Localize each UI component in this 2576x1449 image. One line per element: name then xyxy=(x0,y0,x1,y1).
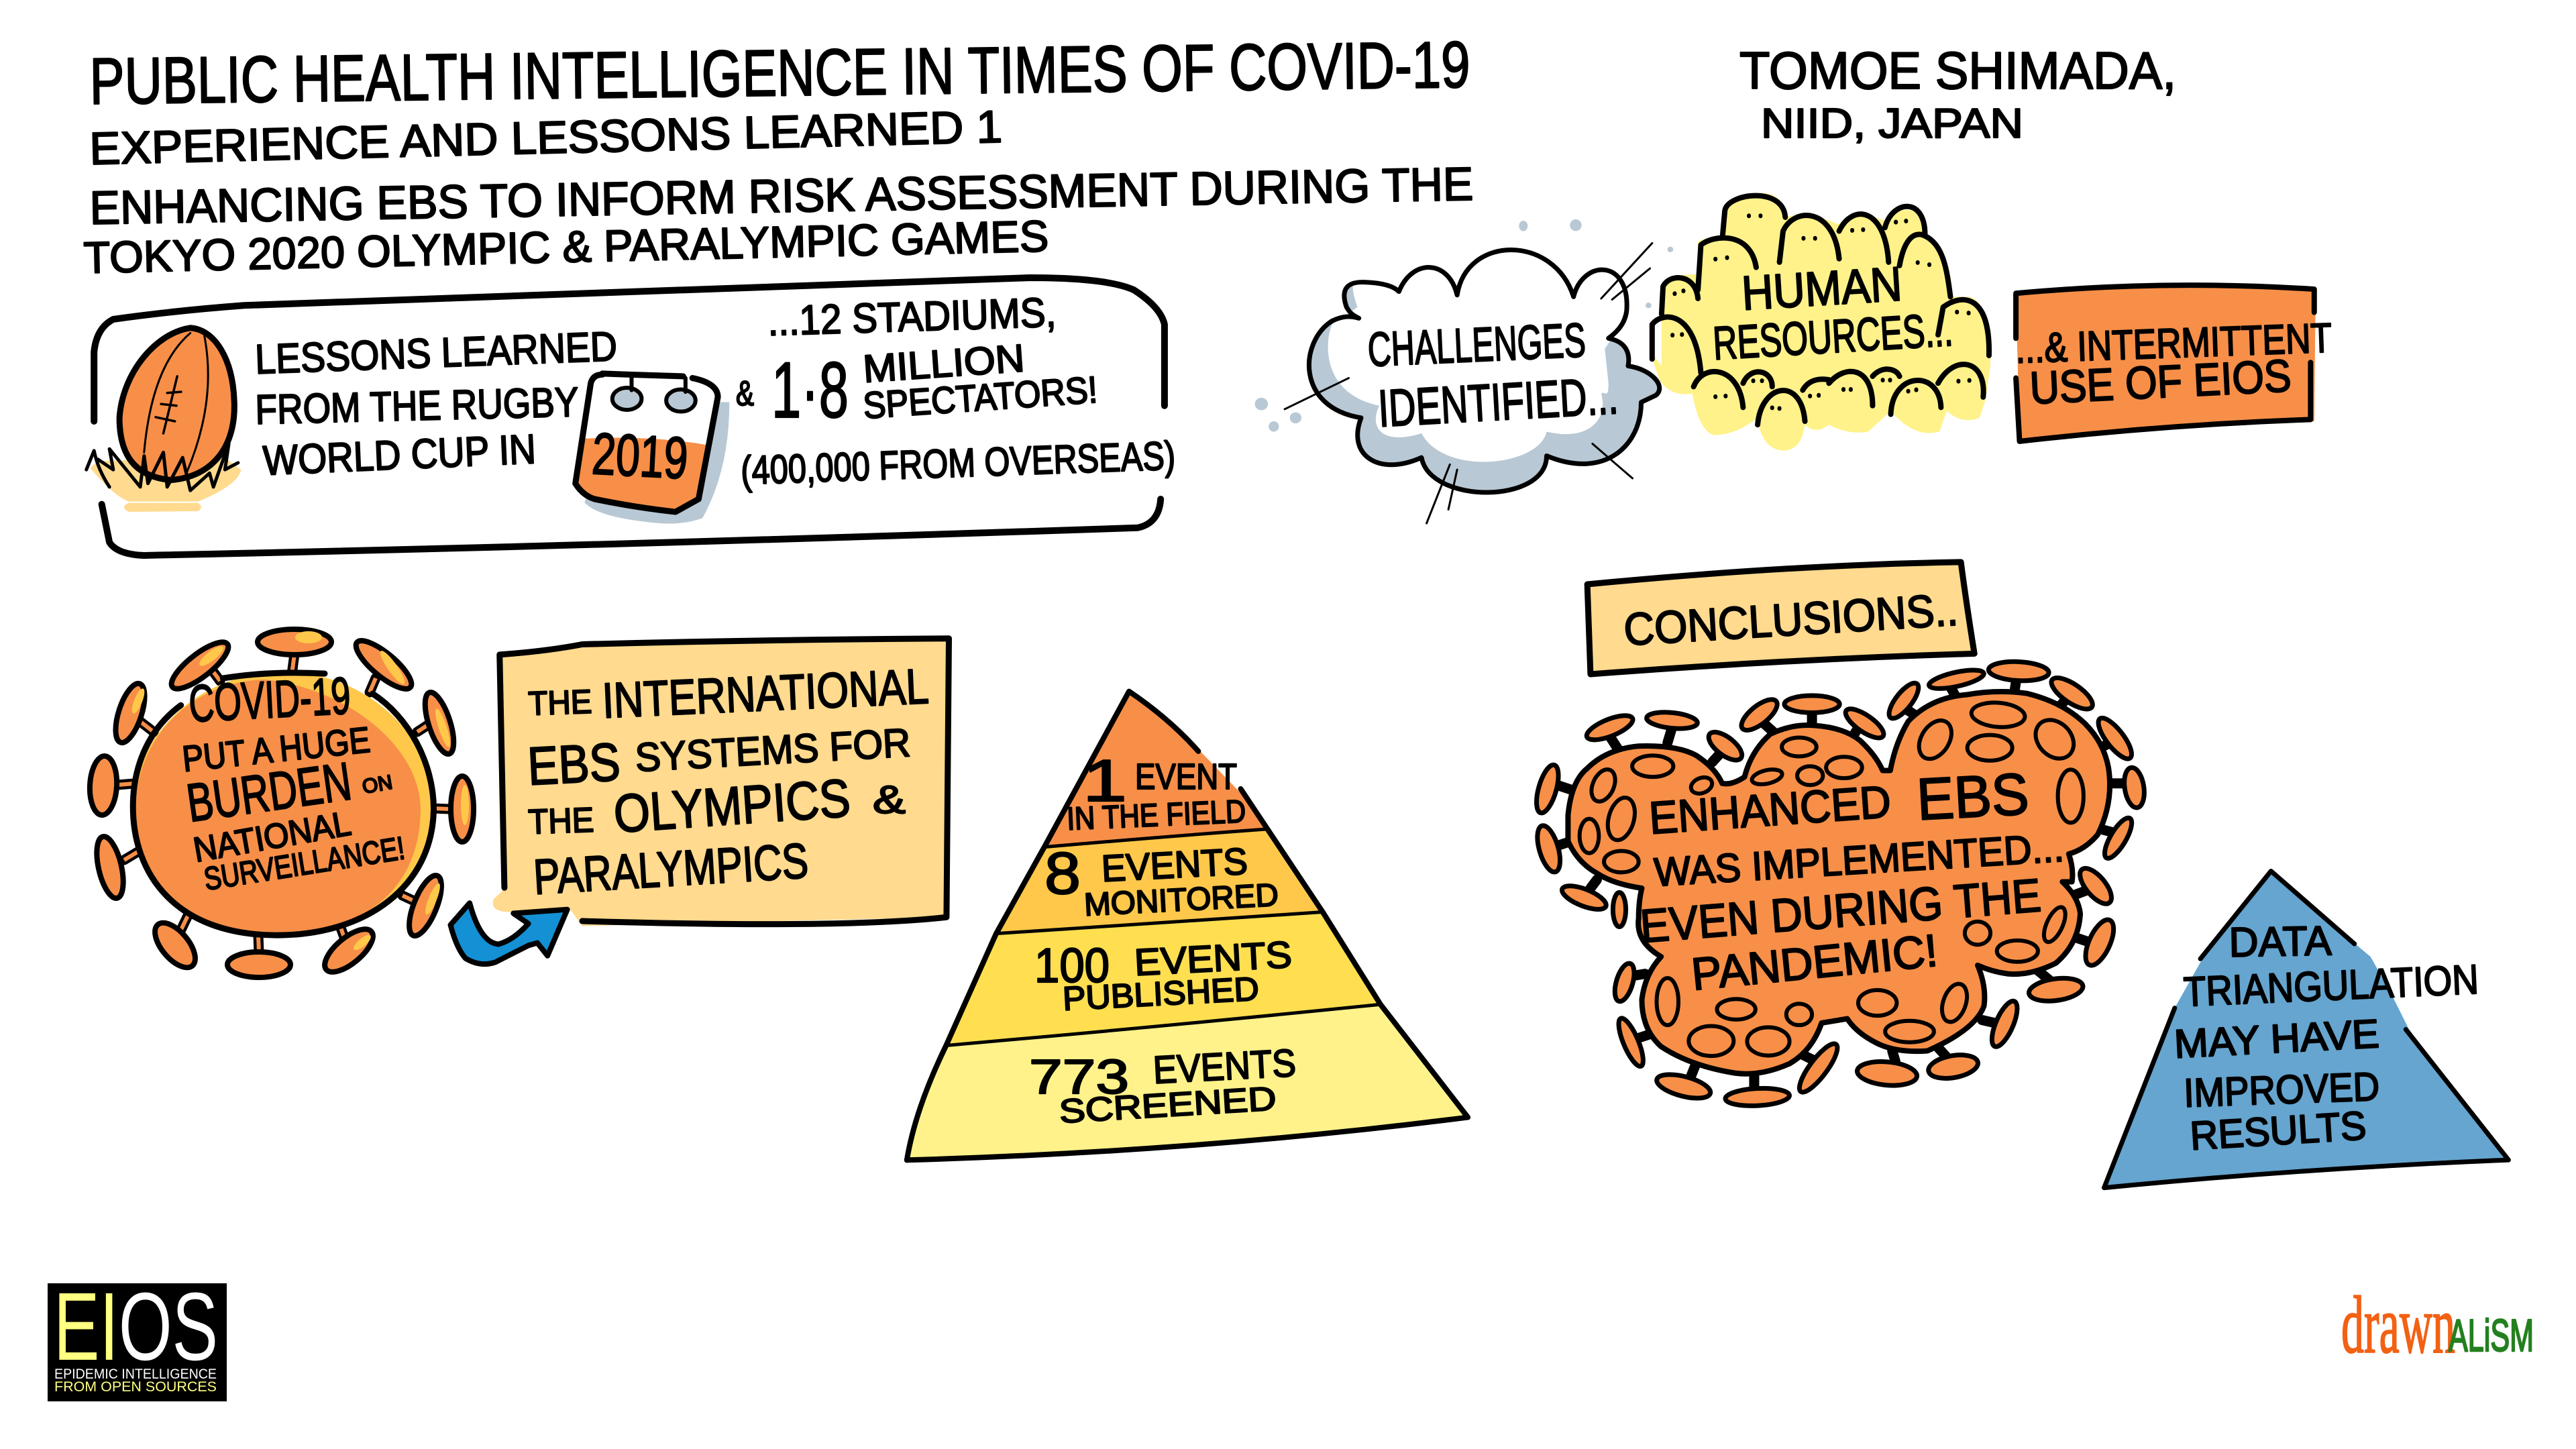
text: international EBS systems: & xyxy=(873,778,906,822)
text: enhanced EBS: ENHANCED xyxy=(1648,776,1892,844)
text: enhanced EBS: PANDEMIC! xyxy=(1689,925,1940,1000)
cluster spots xyxy=(1580,700,2084,1056)
virus body xyxy=(133,672,434,935)
logo: drawnalism: drawn xyxy=(2341,1280,2455,1371)
text: data triangulation: TRIANGULATION xyxy=(2183,957,2479,1016)
text: international EBS systems xyxy=(526,658,930,905)
text: international EBS systems: THE xyxy=(527,683,592,722)
text: stadiums and spectators: MILLION xyxy=(861,336,1026,391)
panel: rugby world cup lessons xyxy=(87,278,1176,555)
text: international EBS systems: OLYMPICS xyxy=(612,768,852,844)
title block xyxy=(83,28,1474,282)
text: challenges identified: IDENTIFIED... xyxy=(1377,366,1619,438)
pyramid labels: SCREENED xyxy=(1058,1079,1277,1130)
text: enhanced EBS: WAS IMPLEMENTED... xyxy=(1653,825,2065,895)
text: enhanced EBS: EVEN DURING THE xyxy=(1638,869,2043,953)
panel: intermittent use of EIOS xyxy=(2015,285,2332,441)
pyramid labels: 8 xyxy=(1044,840,1081,906)
text: international EBS systems: PARALYMPICS xyxy=(532,833,810,905)
crowd of figures xyxy=(1648,193,1990,451)
logo: EIOS: EPIDEMIC INTELLIGENCE xyxy=(54,1366,217,1382)
panel: challenges cloud xyxy=(1255,219,1673,523)
text: covid-19 put a huge burden: SURVEILLANCE! xyxy=(201,830,407,898)
icon: rugby ball in grass xyxy=(87,328,241,512)
panel: covid-19 virus burden xyxy=(89,629,474,979)
text: covid-19 put a huge burden xyxy=(180,665,407,898)
pyramid bands xyxy=(907,692,1468,1160)
spike highlights xyxy=(129,631,469,953)
text: human resources xyxy=(1711,258,1954,370)
pyramid labels xyxy=(1029,747,1297,1130)
text: stadiums and spectators xyxy=(736,290,1176,493)
text: enhanced EBS xyxy=(1638,760,2065,1000)
speech cloud shape xyxy=(1255,219,1673,523)
pyramid labels: 1 xyxy=(1083,747,1127,814)
text: data triangulation: IMPROVED xyxy=(2183,1064,2380,1116)
text: data triangulation xyxy=(2173,918,2479,1159)
panel: enhanced EBS virus cluster xyxy=(1532,660,2147,1108)
pyramid labels: EVENTS xyxy=(1100,840,1248,890)
text: lessons learned xyxy=(254,323,618,484)
text: challenges identified: CHALLENGES xyxy=(1366,313,1587,377)
text: data triangulation: DATA xyxy=(2229,918,2332,966)
orange box xyxy=(2016,285,2316,441)
panel: international EBS callout xyxy=(451,637,951,964)
text: stadiums and spectators: 1·8 xyxy=(771,346,849,435)
cluster body xyxy=(1568,692,2110,1074)
text: covid-19 put a huge burden: BURDEN xyxy=(183,751,355,833)
panel: conclusions heading: CONCLUSIONS.. xyxy=(1622,584,1960,655)
text: stadiums and spectators: (400,000 FROM OVERSEAS) xyxy=(740,433,1176,493)
icon: calendar 2019: 2019 xyxy=(590,420,690,491)
text: international EBS systems: INTERNATIONAL xyxy=(601,658,930,729)
pyramid labels: EVENTS xyxy=(1152,1041,1297,1092)
virus cluster illustration xyxy=(1532,660,2147,1108)
text: covid-19 put a huge burden: PUT A HUGE xyxy=(180,720,372,780)
panel: data triangulation triangle xyxy=(2104,871,2508,1188)
text: intermittent use xyxy=(2015,315,2332,414)
text: stadiums and spectators: ...12 STADIUMS, xyxy=(767,290,1057,345)
text: international EBS systems: SYSTEMS FOR xyxy=(634,720,912,780)
text: stadiums and spectators: SPECTATORS! xyxy=(861,368,1099,427)
text: data triangulation: MAY HAVE xyxy=(2173,1011,2380,1067)
text: intermittent use: USE OF EIOS xyxy=(2029,350,2292,414)
pyramid labels: PUBLISHED xyxy=(1062,970,1260,1018)
pyramid labels: EVENTS xyxy=(1133,933,1293,983)
pyramid labels: 100 xyxy=(1034,939,1110,993)
text: human resources: HUMAN xyxy=(1740,258,1904,321)
conclusions box xyxy=(1587,562,1974,674)
blue triangle xyxy=(2104,871,2508,1188)
text: intermittent use: ...& INTERMITTENT xyxy=(2015,315,2332,372)
author credit xyxy=(1739,41,2176,147)
text: lessons learned: LESSONS LEARNED xyxy=(254,323,618,383)
panel: human resources crowd xyxy=(1648,193,1990,451)
pyramid labels: EVENT xyxy=(1135,757,1237,797)
author credit: TOMOE SHIMADA, xyxy=(1739,41,2176,100)
pyramid labels: IN THE FIELD xyxy=(1066,794,1246,837)
text: lessons learned: FROM THE RUGBY xyxy=(255,379,579,433)
subtitle line 3: TOKYO 2020 OLYMPIC & PARALYMPIC GAMES xyxy=(83,211,1049,282)
logo: EIOS: FROM OPEN SOURCES xyxy=(54,1379,217,1395)
main title: PUBLIC HEALTH INTELLIGENCE IN TIMES OF COVID-19 xyxy=(89,28,1470,118)
text: covid-19 put a huge burden: COVID-19 xyxy=(187,665,352,733)
cluster stems xyxy=(1558,681,2127,1087)
text: enhanced EBS: EBS xyxy=(1915,760,2031,833)
panel: conclusions heading xyxy=(1587,562,1974,674)
text: human resources: RESOURCES... xyxy=(1711,303,1954,370)
cluster spikes xyxy=(1532,660,2147,1108)
text: international EBS systems: THE xyxy=(527,801,594,842)
author credit: NIID, JAPAN xyxy=(1761,101,2023,147)
subtitle line 1: EXPERIENCE AND LESSONS LEARNED 1 xyxy=(89,101,1003,174)
text: data triangulation: RESULTS xyxy=(2189,1103,2367,1159)
text: international EBS systems: EBS xyxy=(526,732,622,796)
pyramid labels: 773 xyxy=(1029,1051,1129,1104)
text: challenges identified xyxy=(1366,313,1619,438)
icon: calendar 2019 xyxy=(576,374,729,524)
box outline xyxy=(94,278,1165,555)
logo: EIOS: EIOS xyxy=(54,1273,218,1381)
subtitle line 2: ENHANCING EBS TO INFORM RISK ASSESSMENT DURING THE xyxy=(89,158,1474,234)
text: stadiums and spectators: & xyxy=(736,374,754,413)
pyramid labels: MONITORED xyxy=(1083,877,1279,923)
text: covid-19 put a huge burden: ON xyxy=(360,771,394,798)
chart: event pyramid xyxy=(907,692,1468,1160)
virus stems xyxy=(117,654,449,953)
virus spikes xyxy=(89,629,474,979)
text: lessons learned: WORLD CUP IN xyxy=(262,426,537,484)
callout box xyxy=(493,637,951,926)
text: covid-19 put a huge burden: NATIONAL xyxy=(191,804,354,870)
arrow: blue curved xyxy=(451,903,568,964)
